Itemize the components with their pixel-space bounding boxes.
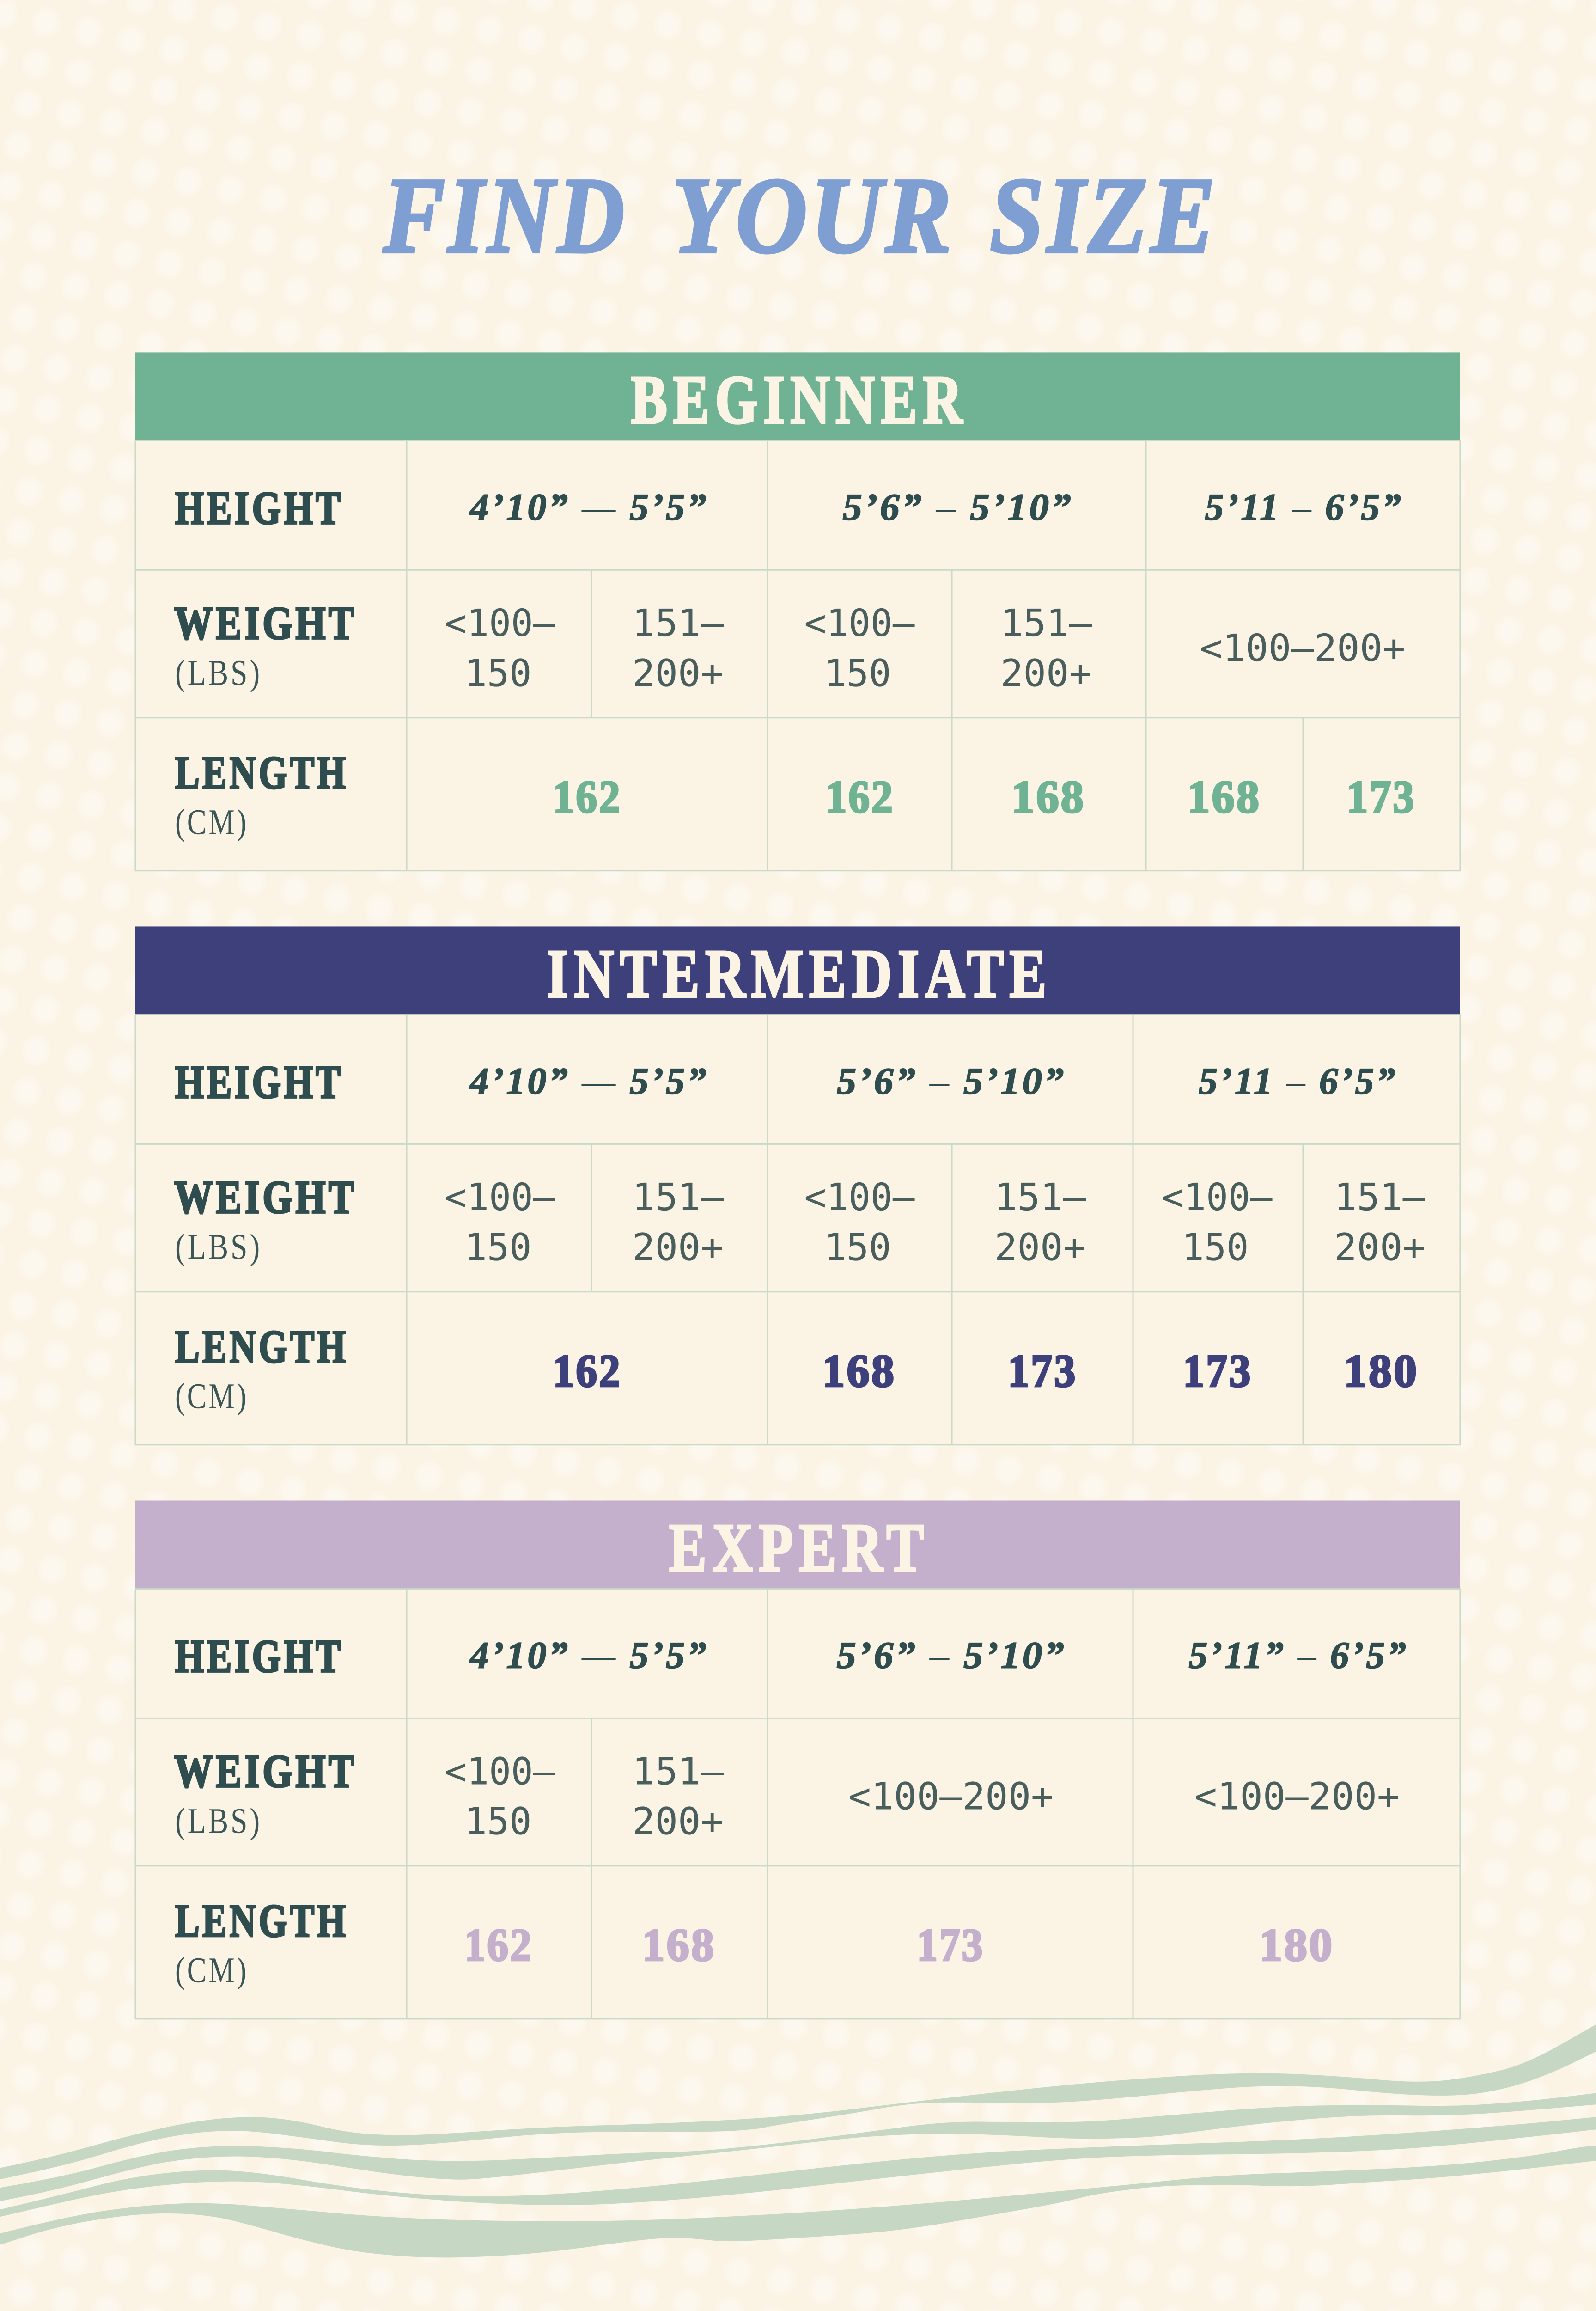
unit: cm: (CM) bbox=[175, 802, 249, 842]
height range 3: 5’11 – 6’5” bbox=[1199, 1060, 1397, 1102]
weight value 3 bbox=[804, 601, 915, 695]
weight value 1: <100– bbox=[445, 1175, 555, 1219]
weight value 3: 150 bbox=[824, 651, 891, 695]
weight value 2: 200+ bbox=[632, 651, 724, 695]
length value 2: 162 bbox=[825, 771, 895, 823]
panel: expert table bbox=[135, 1500, 1460, 2019]
expert header band bbox=[135, 1500, 1460, 1589]
height range 2: 5’6” – 5’10” bbox=[836, 1634, 1066, 1676]
title bbox=[383, 155, 1218, 275]
heading: expert: EXPERT bbox=[669, 1510, 930, 1586]
weight value 5 bbox=[1162, 1175, 1273, 1269]
label: height: HEIGHT bbox=[175, 482, 343, 534]
height range 1: 4’10” — 5’5” bbox=[469, 1634, 708, 1676]
length value 5: 173 bbox=[1346, 771, 1416, 823]
weight value 1 bbox=[445, 1175, 555, 1269]
row: height bbox=[175, 1630, 1408, 1682]
length value 2: 168 bbox=[822, 1345, 896, 1397]
label: weight: WEIGHT bbox=[174, 1171, 357, 1223]
weight value 3: 150 bbox=[824, 1225, 891, 1269]
unit: lbs: (LBS) bbox=[175, 1227, 262, 1267]
weight value 2 bbox=[632, 1749, 724, 1843]
length value 1: 162 bbox=[553, 771, 622, 823]
length value 4: 173 bbox=[1183, 1345, 1252, 1397]
weight value 1: 150 bbox=[465, 651, 531, 695]
weight value 5: <100– bbox=[1162, 1175, 1273, 1219]
decorative green waves at the bottom bbox=[0, 2024, 1596, 2257]
row: length bbox=[175, 1321, 1419, 1416]
length value 1: 162 bbox=[464, 1920, 533, 1971]
heading: intermediate: INTERMEDIATE bbox=[547, 935, 1052, 1012]
weight value 1 bbox=[445, 601, 555, 695]
panel: intermediate table bbox=[135, 926, 1460, 1445]
row: height bbox=[175, 482, 1403, 534]
label: length: LENGTH bbox=[175, 1895, 348, 1947]
label: height: HEIGHT bbox=[175, 1630, 343, 1682]
label: length: LENGTH bbox=[175, 746, 348, 798]
weight value 2: 200+ bbox=[632, 1225, 724, 1269]
weight value 4: <100–200+ bbox=[1194, 1774, 1400, 1818]
weight value 4 bbox=[994, 1175, 1086, 1269]
weight value 4 bbox=[1000, 601, 1092, 695]
weight value 3: <100– bbox=[804, 1175, 915, 1219]
intermediate header band bbox=[135, 926, 1460, 1015]
weight value 4: 151– bbox=[994, 1175, 1086, 1219]
label: weight: WEIGHT bbox=[174, 597, 357, 649]
weight value 2: 151– bbox=[632, 1749, 724, 1793]
unit: cm: (CM) bbox=[175, 1950, 249, 1990]
weight value 2: 151– bbox=[632, 1175, 724, 1219]
unit: cm: (CM) bbox=[175, 1376, 249, 1416]
weight value 2: 200+ bbox=[632, 1799, 724, 1843]
height range 3: 5’11 – 6’5” bbox=[1205, 486, 1403, 528]
height range 1: 4’10” — 5’5” bbox=[469, 1060, 708, 1102]
weight value 4: 151– bbox=[1000, 601, 1092, 645]
length value 3: 173 bbox=[1008, 1345, 1077, 1397]
row: weight bbox=[174, 1745, 1400, 1843]
weight value 3: <100– bbox=[804, 601, 915, 645]
heading: beginner: BEGINNER bbox=[631, 361, 968, 438]
weight value 6: 200+ bbox=[1334, 1225, 1425, 1269]
weight value 5: <100–200+ bbox=[1200, 626, 1406, 670]
length value 2: 168 bbox=[642, 1920, 716, 1971]
length value 4: 180 bbox=[1259, 1920, 1334, 1971]
weight value 2 bbox=[632, 601, 724, 695]
label: length: LENGTH bbox=[175, 1321, 348, 1373]
weight value 2: 151– bbox=[632, 601, 724, 645]
weight value 2 bbox=[632, 1175, 724, 1269]
weight value 1: <100– bbox=[445, 1749, 555, 1793]
beginner header band bbox=[135, 352, 1460, 440]
row: weight bbox=[174, 597, 1406, 695]
length value 3: 168 bbox=[1011, 771, 1085, 823]
weight value 1: 150 bbox=[465, 1225, 531, 1269]
row: weight bbox=[174, 1171, 1425, 1269]
weight value 1 bbox=[445, 1749, 555, 1843]
row: length bbox=[175, 746, 1416, 842]
weight value 5: 150 bbox=[1182, 1225, 1249, 1269]
length value 5: 180 bbox=[1344, 1345, 1419, 1397]
weight value 4: 200+ bbox=[994, 1225, 1086, 1269]
length value 3: 173 bbox=[917, 1920, 984, 1971]
weight value 1: 150 bbox=[465, 1799, 531, 1843]
weight value 4: 200+ bbox=[1000, 651, 1092, 695]
title: YOUR bbox=[672, 155, 955, 275]
row: height bbox=[175, 1056, 1397, 1108]
weight value 6 bbox=[1334, 1175, 1425, 1269]
title: SIZE bbox=[990, 155, 1218, 275]
weight value 6: 151– bbox=[1334, 1175, 1425, 1219]
weight value 3: <100–200+ bbox=[848, 1774, 1054, 1818]
label: weight: WEIGHT bbox=[174, 1745, 357, 1797]
height range 3: 5’11” – 6’5” bbox=[1188, 1634, 1408, 1676]
unit: lbs: (LBS) bbox=[175, 653, 262, 693]
length value 1: 162 bbox=[553, 1345, 622, 1397]
height range 1: 4’10” — 5’5” bbox=[469, 486, 708, 528]
height range 2: 5’6” – 5’10” bbox=[837, 1060, 1066, 1102]
panel: beginner table bbox=[135, 352, 1460, 871]
length value 4: 168 bbox=[1187, 771, 1261, 823]
height range 2: 5’6” – 5’10” bbox=[843, 486, 1073, 528]
unit: lbs: (LBS) bbox=[175, 1801, 262, 1841]
weight value 1: <100– bbox=[445, 601, 555, 645]
title: FIND bbox=[383, 155, 627, 275]
row: length bbox=[175, 1895, 1334, 1990]
weight value 3 bbox=[804, 1175, 915, 1269]
label: height: HEIGHT bbox=[175, 1056, 343, 1108]
